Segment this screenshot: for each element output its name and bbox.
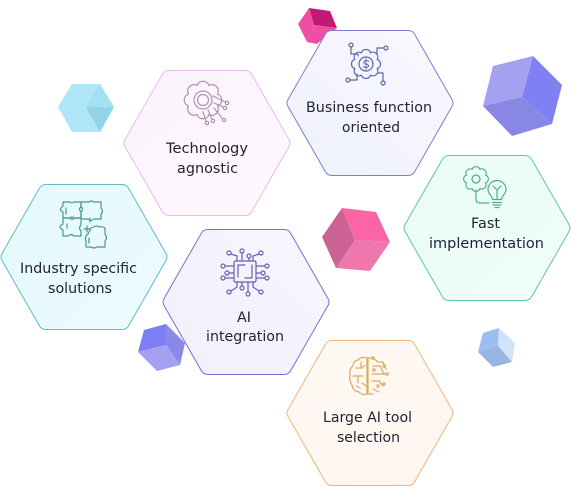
cube: large purple — [483, 56, 562, 136]
text: Technology agnostic: Technology — [165, 141, 248, 157]
icon: brain — [350, 357, 388, 395]
text: Industry specific solutions — [20, 261, 137, 297]
text: Business function oriented: oriented — [342, 120, 400, 136]
icon: puzzle pieces — [60, 201, 106, 248]
text: Large AI tool selection — [323, 410, 412, 446]
text: AI integration: integration — [206, 329, 284, 345]
text: Fast implementation: implementation — [429, 236, 544, 252]
panel: AI integration — [163, 230, 329, 374]
hexagon: industry — [1, 184, 167, 330]
panel: Fast implementation — [404, 156, 570, 300]
text: AI integration: AI — [237, 310, 251, 326]
text: AI integration — [206, 310, 284, 345]
hexagon: large — [287, 340, 453, 486]
hexagon: technology — [124, 70, 290, 216]
text: Business function oriented: Business function — [306, 100, 432, 116]
panel: Technology agnostic — [124, 70, 290, 216]
hexagon: fast — [404, 156, 570, 300]
text: Technology agnostic — [165, 141, 248, 177]
cube: small magenta — [298, 8, 337, 44]
text: Business function oriented — [306, 100, 432, 136]
cube: light blue — [58, 84, 114, 132]
hexagon: business — [287, 30, 453, 176]
text: Large AI tool selection: selection — [337, 430, 400, 446]
panel: Large AI tool selection — [287, 340, 453, 486]
cube: pink centre — [322, 208, 390, 271]
cube: small purple — [138, 324, 185, 371]
text: Large AI tool selection: Large AI tool — [323, 410, 412, 426]
panel: Business function oriented — [287, 30, 453, 176]
icon: gear with circuit lines — [184, 81, 229, 125]
icon: dollar gear — [346, 43, 388, 85]
text: Fast implementation — [429, 216, 544, 252]
cube: small pale blue — [478, 328, 515, 367]
text: Industry specific solutions: Industry specific — [20, 261, 137, 277]
text: Technology agnostic: agnostic — [177, 161, 238, 177]
panel: Industry specific solutions — [1, 184, 167, 330]
text: Industry specific solutions: solutions — [48, 281, 112, 297]
text: Fast implementation: Fast — [471, 216, 500, 232]
icon: AI chip — [221, 249, 269, 296]
icon: gear and light bulb — [464, 167, 506, 208]
hexagon: AI — [163, 230, 329, 374]
